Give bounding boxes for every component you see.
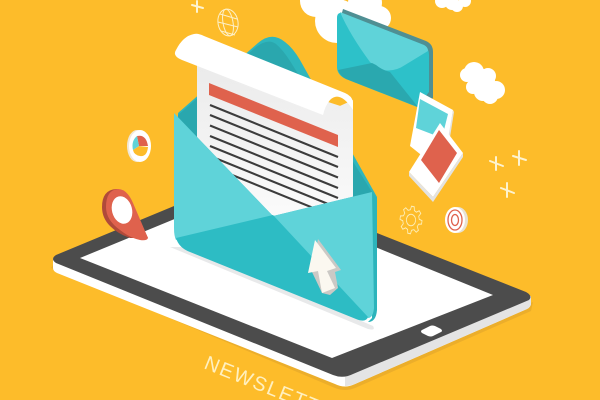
- home button: [421, 326, 442, 336]
- paper curl: [175, 34, 353, 115]
- cloud: behind flying envelope: [300, 0, 391, 43]
- red headline bar: [209, 83, 338, 147]
- icon: photo blue: [410, 92, 454, 158]
- paper letter: [197, 66, 353, 216]
- icon: target: [445, 207, 468, 233]
- icon: map pin: [102, 189, 148, 240]
- icon: open envelope: [174, 34, 377, 322]
- tablet: [51, 180, 533, 390]
- right flap: [273, 192, 374, 318]
- cloud: right: [460, 62, 505, 104]
- envelope side: [368, 192, 377, 322]
- icon: plus signs: [192, 1, 526, 197]
- icon: photo red: [409, 123, 463, 202]
- tablet screen: [80, 192, 493, 358]
- cursor arrow: [308, 239, 341, 295]
- text lines: [210, 105, 338, 218]
- envelope back flap: [178, 37, 377, 230]
- icon: globe: [216, 7, 240, 38]
- envelope shadow: [170, 247, 374, 330]
- cloud: top right: [435, 0, 471, 12]
- icon: pie chart: [127, 130, 151, 162]
- icon: flying envelope: [337, 9, 433, 108]
- icon: gear: [398, 204, 424, 236]
- left flap: [174, 113, 273, 240]
- bottom panel: [176, 215, 368, 321]
